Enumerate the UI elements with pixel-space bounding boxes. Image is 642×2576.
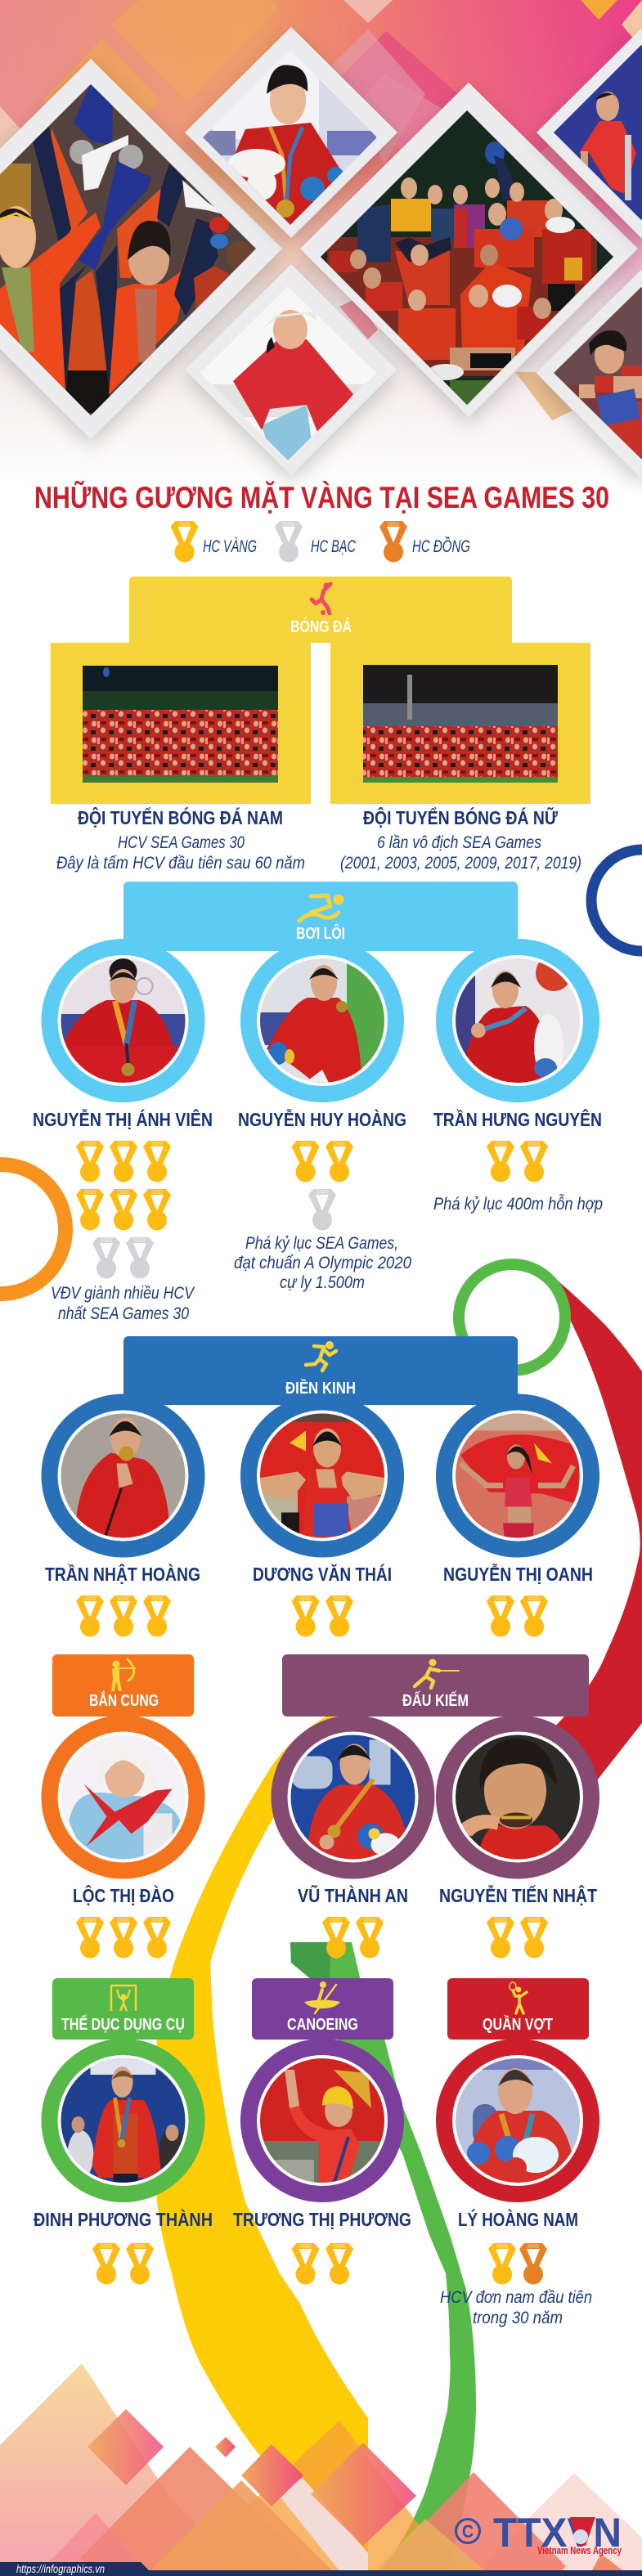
panel: tennis [436,1978,599,2327]
portrait: Nguyen Thi Anh Vien [41,939,204,1102]
gymnastics header [52,1978,194,2040]
portrait: Nguyen Huy Hoang [240,939,404,1102]
panel: archery [41,1654,204,1958]
icon: gymnast on rings [111,1986,136,2011]
Hung Nguyen note: Phá kỷ lục 400m hỗn hợp [433,1195,603,1214]
tennis header [447,1978,589,2040]
medal legend: HC VÀNG [203,537,257,556]
women's team note: (2001, 2003, 2005, 2009, 2017, 2019) [340,854,581,873]
portrait: Vu Thanh An [272,1716,435,1879]
Duong Van Thai medals [291,1595,353,1637]
portrait: Ly Hoang Nam [436,2039,599,2202]
athletics header [123,1336,518,1405]
photo diamond: swimmer Anh Vien [185,27,397,238]
icon: tennis player [510,1982,527,2013]
swimming label: BƠI LỘI [296,923,345,943]
Anh Vien note: VĐV giành nhiều HCV [51,1284,195,1303]
photo: women's football team [363,665,558,783]
Huy Hoang name: NGUYỄN HUY HOÀNG [238,1107,406,1130]
icon: swimmer [299,895,343,921]
decorative ring: blue [591,850,642,951]
Huy Hoang note: đạt chuẩn A Olympic 2020 [234,1254,411,1272]
source url: https://infographics.vn [16,2562,105,2575]
Nguyen Tien Nhat medals [487,1917,548,1958]
gymnastics label: THỂ DỤC DỤNG CỤ [61,2015,185,2034]
canoeing name: TRƯƠNG THỊ PHƯƠNG [233,2209,411,2230]
panel: football [51,577,590,873]
men's team note: Đây là tấm HCV đầu tiên sau 60 năm [56,854,305,873]
tennis medals [488,2243,547,2285]
panel: canoeing [233,1978,411,2285]
men's team note [56,833,305,873]
Nguyen Tien Nhat name: NGUYỄN TIẾN NHẬT [439,1883,597,1906]
archery header [52,1654,194,1717]
tennis note: trong 30 năm [473,2309,563,2327]
women's team note: 6 lần vô địch SEA Games [377,833,541,852]
Huy Hoang note [234,1234,411,1292]
decorative ring: orange [0,1165,65,1294]
decorative swoosh: green [290,1942,476,2569]
icon: fencer [415,1658,459,1688]
swimming header [123,882,518,951]
photo diamond: tennis player [536,29,642,238]
photo diamond: archer Loc Thi Dao [185,264,397,475]
decorative swoosh: red [548,1276,642,1799]
decorative swoosh: yellow [157,1716,368,2553]
tennis label: QUẦN VỢT [483,2015,553,2034]
tennis name: LÝ HOÀNG NAM [458,2208,578,2230]
portrait: Tran Hung Nguyen [436,939,599,1102]
Hung Nguyen medals [487,1141,548,1183]
photo: men's football team [83,666,278,783]
gymnastics name: ĐINH PHƯƠNG THÀNH [34,2208,213,2230]
footer bar [0,2562,642,2576]
panel: swimming [33,882,603,1323]
photo diamond: men's football team [300,83,638,417]
fencing header [282,1654,589,1717]
decorative ring: green [459,1264,565,1371]
Nguyen Thi Oanh name: NGUYỄN THỊ OANH [443,1562,593,1585]
Huy Hoang medals [291,1141,353,1230]
Duong Van Thai name: DƯƠNG VĂN THÁI [253,1563,392,1585]
women's team note [340,833,581,873]
athletics label: ĐIỀN KINH [285,1379,356,1398]
portrait: Tran Nhat Hoang [41,1393,204,1557]
canoeing header [252,1978,393,2040]
portrait: Nguyen Thi Oanh [436,1393,599,1557]
bottom diamond decoration [0,2363,642,2576]
portrait: Duong Van Thai [240,1393,404,1557]
Hung Nguyen name: TRẦN HƯNG NGUYÊN [433,1108,602,1130]
icon: runner [306,1341,336,1371]
panel: fencing [272,1654,599,1958]
logo: TTXVN: TTXVN [493,2510,622,2556]
Anh Vien note [51,1284,195,1323]
portrait: Dinh Phuong Thanh [41,2039,204,2202]
header background [0,0,642,491]
portrait: Nguyen Tien Nhat [436,1716,599,1879]
Anh Vien note: nhất SEA Games 30 [58,1304,189,1323]
football panel background [51,577,590,804]
logo: TTXVN: C [462,2521,474,2542]
Huy Hoang note: Phá kỷ lục SEA Games, [245,1234,398,1253]
photo diamond: runner kissing bib [536,270,642,478]
canoeing medals [291,2243,353,2285]
portrait: Truong Thi Phuong [240,2039,404,2202]
Huy Hoang note: cự ly 1.500m [280,1273,365,1292]
panel: gymnastics [34,1978,213,2285]
panel: athletics [41,1336,599,1637]
portrait: Loc Thi Dao [41,1716,204,1879]
medal legend [170,521,470,563]
men's team name: ĐỘI TUYỂN BÓNG ĐÁ NAM [78,806,283,828]
Tran Nhat Hoang medals [76,1595,171,1637]
archery name: LỘC THỊ ĐÀO [73,1884,174,1906]
men's team note: HCV SEA Games 30 [118,833,245,852]
tennis note: HCV đơn nam đầu tiên [440,2288,592,2307]
medal legend: HC ĐỒNG [412,536,470,556]
medal legend: HC BẠC [311,537,357,556]
icon: canoeist [304,1981,340,2013]
Anh Vien name: NGUYỄN THỊ ÁNH VIÊN [33,1107,213,1130]
canoeing label: CANOEING [287,2016,358,2034]
Tran Nhat Hoang name: TRẦN NHẬT HOÀNG [45,1563,200,1585]
icon: archer [111,1658,136,1691]
photo diamond: women's football players [0,59,282,439]
Vu Thanh An name: VŨ THÀNH AN [298,1884,408,1906]
Vu Thanh An medals [322,1917,384,1958]
fencing label: ĐẤU KIẾM [402,1691,469,1710]
Nguyen Thi Oanh medals [487,1595,548,1637]
gymnastics medals [92,2243,154,2285]
Anh Vien medals [76,1141,171,1279]
tennis note [440,2288,592,2327]
archery medals [76,1917,171,1958]
icon: football player [312,582,330,615]
archery label: BẮN CUNG [89,1690,159,1710]
women's team name: ĐỘI TUYỂN BÓNG ĐÁ NỮ [363,806,559,828]
football label: BÓNG ĐÁ [290,617,352,636]
